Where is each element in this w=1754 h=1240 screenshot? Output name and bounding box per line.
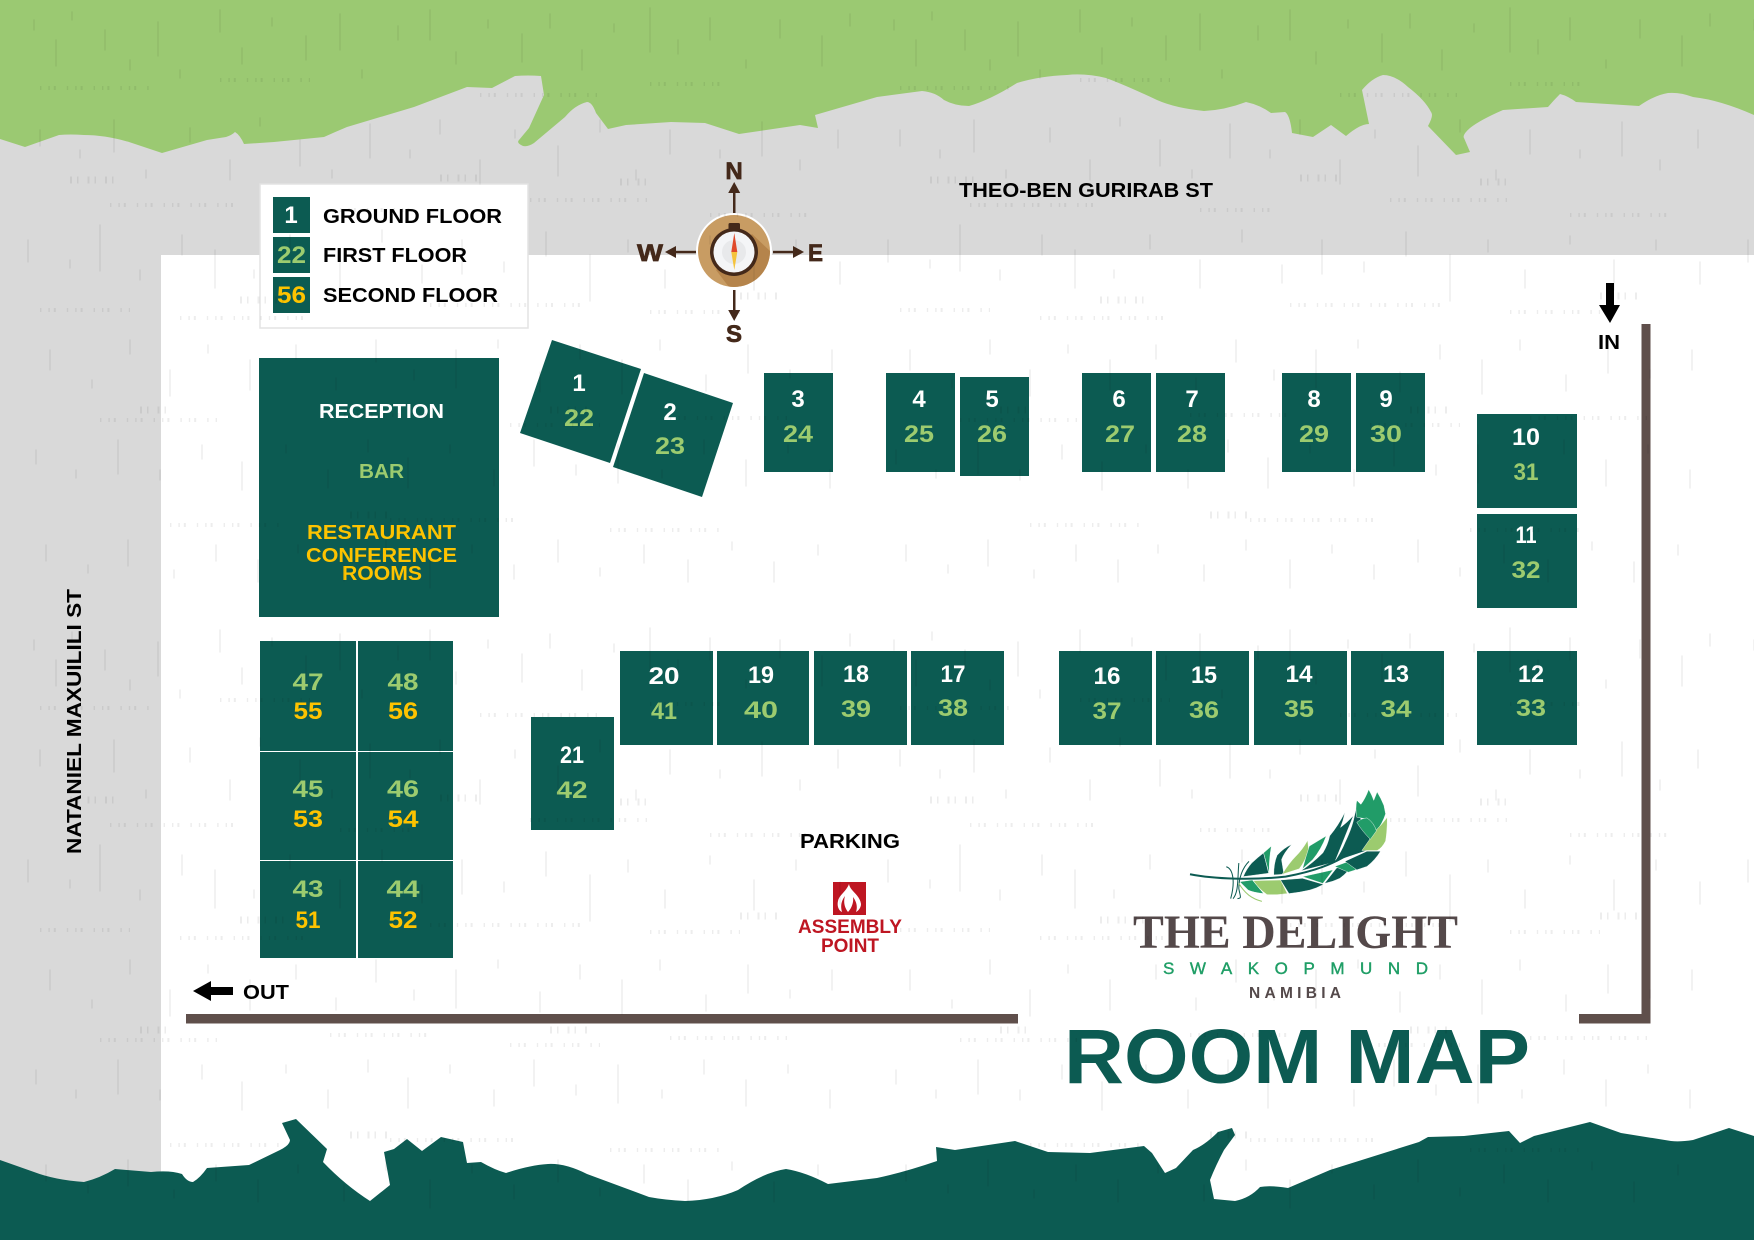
legend: first floor: [273, 237, 468, 273]
room 12 / 33: [1477, 651, 1577, 745]
block: reception, bar, restaurant, conference rooms: RECEPTION: [319, 401, 444, 423]
legend: second floor: 56: [277, 282, 306, 309]
arrow: out: [193, 981, 233, 1001]
room 21 / 42: 21: [560, 742, 584, 769]
room 10 / 31: 31: [1514, 459, 1538, 486]
room 19 / 40: [717, 651, 809, 745]
block: reception, bar, restaurant, conference rooms: BAR: [359, 461, 405, 483]
logo: The Delight Swakopmund Namibia: THE DELIGHT: [1133, 906, 1458, 959]
room 16 / 37: 16: [1094, 663, 1120, 690]
legend: first floor: FIRST FLOOR: [323, 245, 468, 267]
icon: compass with N E S W arrows: [637, 158, 823, 348]
room 16 / 37: 37: [1092, 698, 1122, 725]
panel: floor legend: [260, 184, 528, 328]
street label: Nataniel Maxuilili St: NATANIEL MAXUILILI ST: [64, 589, 86, 854]
rooms 44 / 52: 44: [386, 876, 420, 903]
block: reception, bar, restaurant, conference rooms: ROOMS: [342, 563, 422, 585]
room 1 / 22: 22: [564, 405, 594, 432]
title: room map: ROOM MAP: [1064, 1014, 1530, 1100]
top green torn band: [0, 0, 1754, 155]
rooms 43 / 51: 43: [292, 876, 324, 903]
wall: bottom left boundary: [186, 1014, 1018, 1024]
icon: compass with N E S W arrows: W: [637, 240, 663, 267]
room 20 / 41: 41: [651, 698, 677, 725]
white property area: [161, 255, 1754, 1240]
room 20 / 41: [620, 651, 713, 745]
room 15 / 36: 36: [1189, 697, 1219, 724]
logo: The Delight Swakopmund Namibia: [1133, 789, 1458, 1002]
room 13 / 34: 13: [1383, 661, 1409, 688]
rooms 45 / 53: 45: [292, 776, 324, 803]
room 9 / 30: 9: [1379, 386, 1393, 413]
room 11 / 32: 11: [1516, 522, 1536, 549]
room 16 / 37: [1059, 651, 1152, 745]
logo: The Delight Swakopmund Namibia: NAMIBIA: [1249, 985, 1341, 1002]
room 10 / 31: [1477, 414, 1577, 508]
block: reception, bar, restaurant, conference rooms: [259, 358, 499, 617]
room 12 / 33: 33: [1516, 695, 1546, 722]
room 8 / 29: 29: [1299, 421, 1329, 448]
room 9 / 30: 30: [1370, 421, 1402, 448]
room 7 / 28: 7: [1185, 386, 1199, 413]
room 4 / 25: [886, 373, 955, 472]
block: reception, bar, restaurant, conference rooms: RESTAURANT: [307, 522, 456, 544]
rooms 46 / 54: [358, 752, 453, 860]
rooms 44 / 52: 52: [388, 907, 418, 934]
room 14 / 35: 14: [1286, 661, 1313, 688]
rooms 46 / 54: 46: [387, 776, 419, 803]
legend: ground floor: GROUND FLOOR: [323, 206, 503, 228]
room 10 / 31: 10: [1512, 424, 1540, 451]
arrow: in: [1599, 283, 1620, 323]
legend: ground floor: [273, 197, 503, 233]
room 7 / 28: [1156, 373, 1225, 472]
room 3 / 24: [764, 373, 833, 472]
room 17 / 38: 17: [940, 661, 966, 688]
room 9 / 30: [1356, 373, 1425, 472]
room 21 / 42: [531, 717, 614, 830]
room 14 / 35: 35: [1284, 696, 1314, 723]
room 8 / 29: [1282, 373, 1351, 472]
icon: feather: [1190, 789, 1387, 901]
room 3 / 24: 24: [783, 421, 814, 448]
room 1 / 22: 1: [572, 370, 586, 397]
street label: Theo-Ben Gurirab St: THEO-BEN GURIRAB ST: [959, 180, 1213, 202]
rooms 47 / 55: 55: [294, 698, 322, 725]
rooms 47 / 55: 47: [292, 669, 324, 696]
assembly point marker: [798, 882, 902, 957]
icon: compass with N E S W arrows: E: [808, 240, 823, 267]
assembly point marker: ASSEMBLY: [798, 917, 902, 938]
room 13 / 34: [1351, 651, 1444, 745]
room 11 / 32: 32: [1512, 557, 1540, 584]
icon: flame in red square: [833, 882, 866, 915]
room 8 / 29: 8: [1307, 386, 1321, 413]
rooms 43 / 51: 51: [296, 907, 320, 934]
room 2 / 23: 23: [655, 433, 685, 460]
legend: second floor: [273, 277, 499, 313]
legend: second floor: SECOND FLOOR: [323, 285, 499, 307]
room 18 / 39: [814, 651, 907, 745]
icon: compass with N E S W arrows: S: [726, 321, 742, 348]
room 4 / 25: 4: [912, 386, 926, 413]
room 5 / 26: 26: [977, 421, 1007, 448]
room 18 / 39: 39: [841, 696, 871, 723]
rooms 46 / 54: 54: [388, 806, 419, 833]
room 17 / 38: [911, 651, 1004, 745]
rooms 44 / 52: [358, 861, 453, 958]
legend: first floor: 22: [277, 242, 306, 269]
rooms 45 / 53: 53: [293, 806, 323, 833]
room 17 / 38: 38: [938, 695, 968, 722]
room 4 / 25: 25: [904, 421, 934, 448]
label: out: OUT: [243, 982, 289, 1004]
room 3 / 24: 3: [791, 386, 805, 413]
rooms 48 / 56: 48: [388, 669, 418, 696]
assembly point marker: POINT: [821, 936, 879, 957]
legend: ground floor: 1: [284, 202, 298, 229]
rooms 43 / 51: [260, 861, 356, 958]
room 20 / 41: 20: [648, 663, 680, 690]
room 5 / 26: [960, 377, 1029, 476]
room 6 / 27: [1082, 373, 1151, 472]
rooms 48 / 56: 56: [388, 698, 418, 725]
block: reception, bar, restaurant, conference rooms: CONFERENCE: [306, 545, 457, 567]
room 13 / 34: 34: [1380, 696, 1412, 723]
room 6 / 27: 27: [1105, 421, 1135, 448]
room 15 / 36: [1156, 651, 1249, 745]
room 15 / 36: 15: [1191, 662, 1217, 689]
label: in: IN: [1598, 332, 1620, 354]
room 2 / 23: [613, 373, 733, 497]
room 5 / 26: 5: [985, 386, 999, 413]
room 19 / 40: 19: [748, 662, 774, 689]
rooms 45 / 53: [260, 752, 356, 860]
room 6 / 27: 6: [1112, 386, 1126, 413]
room 11 / 32: [1477, 514, 1577, 608]
room 21 / 42: 42: [556, 777, 588, 804]
wall: right boundary: [1579, 324, 1650, 1024]
room 7 / 28: 28: [1177, 421, 1207, 448]
icon: compass with N E S W arrows: N: [725, 158, 743, 185]
rooms 47 / 55: [260, 641, 356, 751]
logo: The Delight Swakopmund Namibia: SWAKOPMUND: [1163, 959, 1428, 978]
room 1 / 22: [520, 340, 641, 463]
room 18 / 39: 18: [843, 661, 869, 688]
room 14 / 35: [1254, 651, 1347, 745]
room 12 / 33: 12: [1518, 661, 1544, 688]
room 2 / 23: 2: [663, 399, 677, 426]
label: parking: PARKING: [800, 831, 900, 853]
room 19 / 40: 40: [744, 697, 778, 724]
rooms 48 / 56: [358, 641, 453, 751]
bottom dark green torn band: [0, 1119, 1754, 1240]
